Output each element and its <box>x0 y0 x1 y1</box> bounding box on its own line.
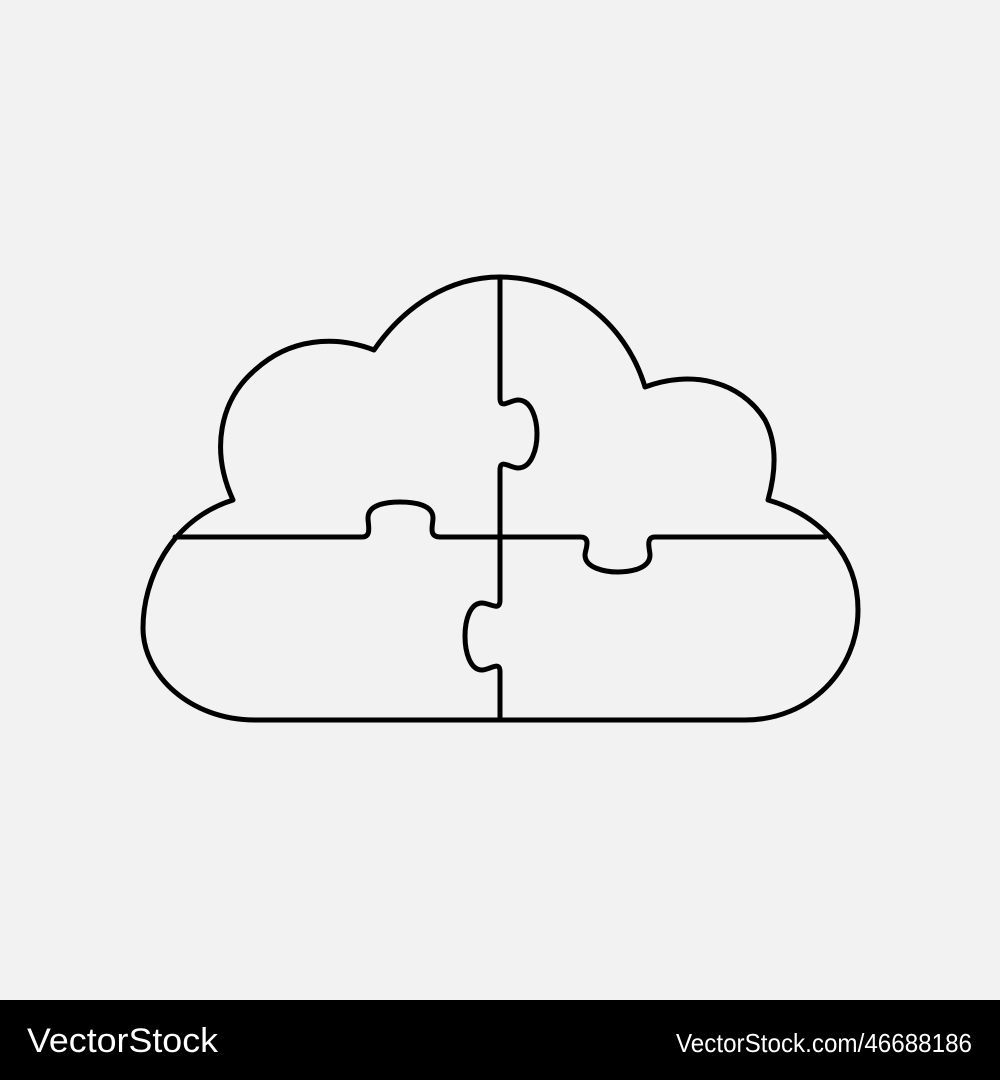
footer bar <box>0 1000 1000 1080</box>
footer brand text: VectorStock <box>27 1022 219 1060</box>
footer image id text: VectorStock.com/46688186 <box>676 1028 972 1058</box>
vertical seam with tabs <box>465 277 537 720</box>
horizontal seam with tabs <box>175 502 825 572</box>
cloud outline <box>143 277 858 720</box>
icon: puzzle cloud <box>143 277 858 720</box>
